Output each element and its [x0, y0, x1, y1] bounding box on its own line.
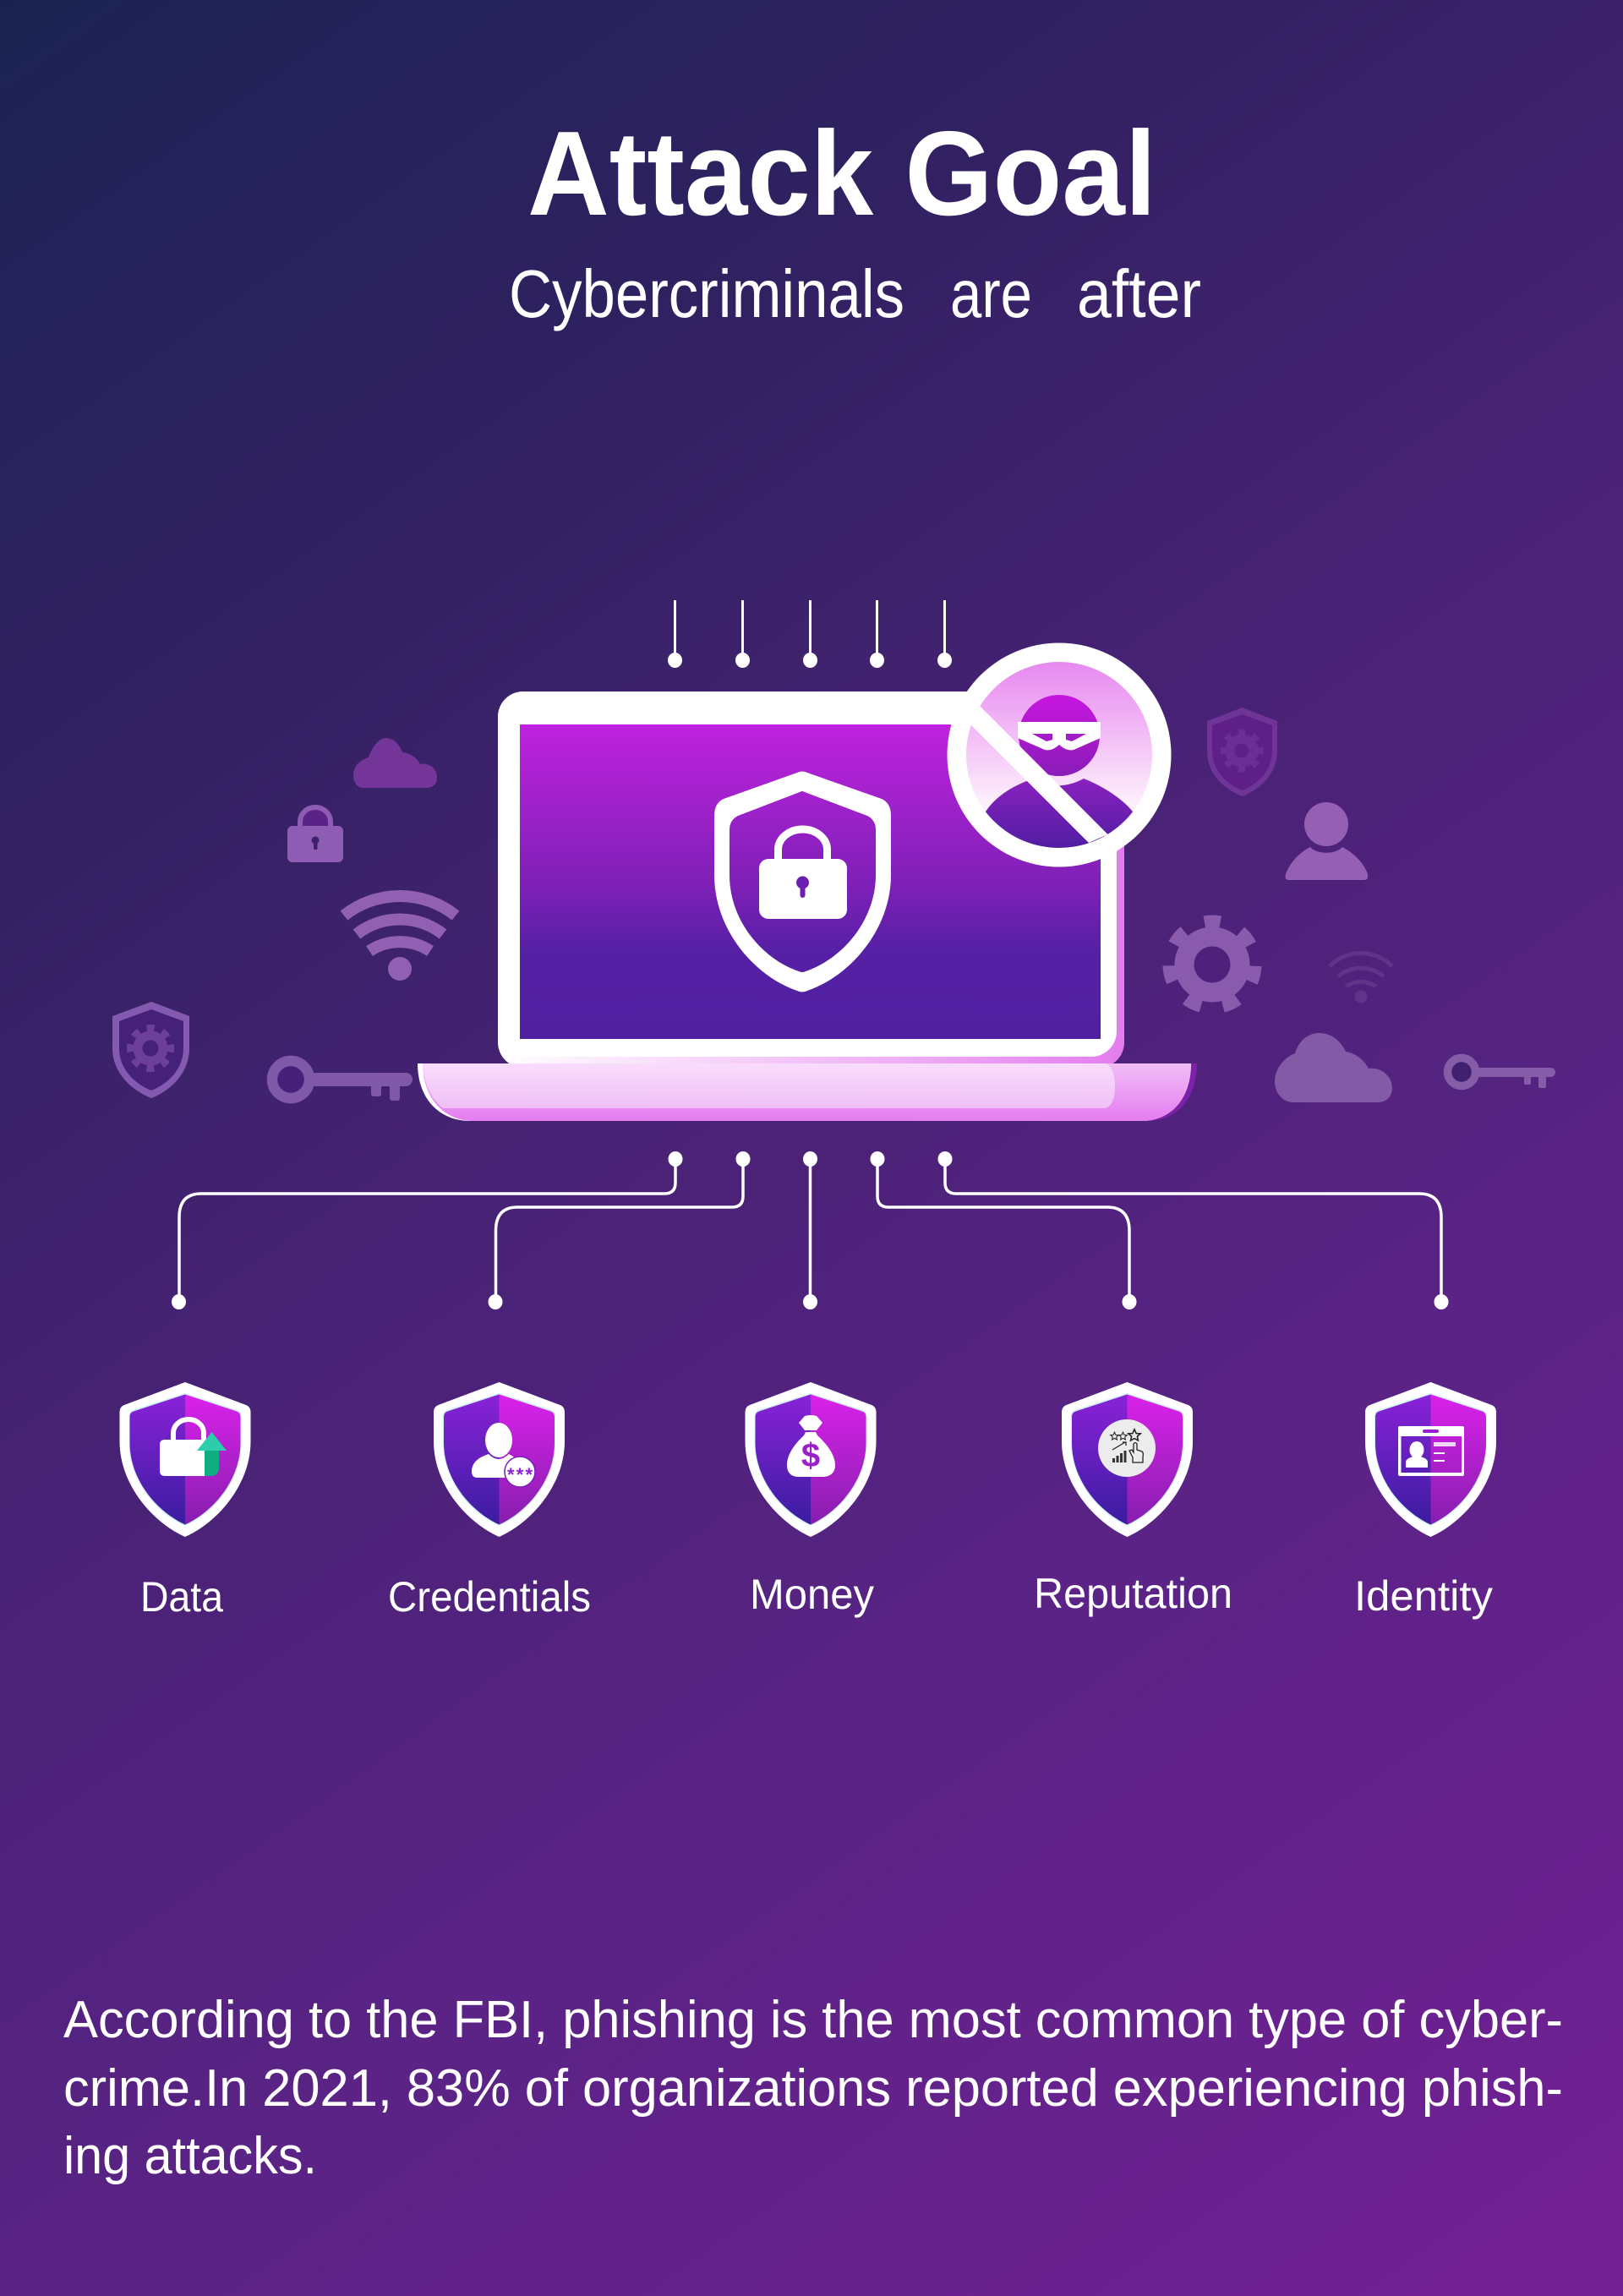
label: Identity: Identity	[1354, 1572, 1493, 1620]
laptop lid rim	[498, 692, 1124, 1068]
no-hacker badge	[947, 642, 1172, 867]
item: Reputation	[1034, 1382, 1232, 1617]
laptop screen	[520, 724, 1101, 1039]
item: Identity	[1354, 1382, 1496, 1620]
connector lines	[172, 1151, 1449, 1309]
icon: wifi left	[344, 896, 456, 981]
icon: money bag: $	[801, 1437, 820, 1474]
icon: user with password: ***	[507, 1464, 533, 1485]
label: Data: Data	[140, 1573, 223, 1621]
hacker figure	[986, 695, 1133, 854]
subtitle: are	[950, 256, 1032, 331]
icon: padlock left	[287, 807, 343, 862]
badge white ring	[947, 642, 1172, 867]
icon: user with password	[472, 1423, 535, 1487]
paragraph: ing attacks.	[63, 2127, 317, 2185]
subtitle	[509, 256, 1201, 331]
icon: large gear right	[1170, 922, 1254, 1007]
subtitle: after	[1077, 256, 1201, 331]
top connector pins	[668, 600, 952, 668]
item: Data	[120, 1382, 250, 1621]
icon: gear shield right	[1207, 708, 1277, 796]
item: Money	[746, 1382, 876, 1618]
prohibition slash	[970, 706, 1107, 843]
title: Attack Goal	[527, 107, 1156, 241]
paragraph	[63, 1991, 1563, 2185]
shield: Reputation	[1062, 1382, 1193, 1537]
icon: cloud upper left	[353, 738, 437, 788]
paragraph: According to the FBI, phishing is the most common type of cyber-	[63, 1991, 1563, 2049]
icon: id card	[1398, 1426, 1464, 1476]
icon: large cloud right	[1275, 1033, 1392, 1102]
icon: rating badge	[1098, 1419, 1156, 1477]
icon: key left	[272, 1061, 413, 1101]
icon: gear shield left	[112, 1002, 189, 1098]
icon: key right	[1447, 1058, 1555, 1088]
laptop	[418, 692, 1197, 1121]
icon: small wifi right	[1330, 954, 1392, 1003]
label: Reputation: Reputation	[1034, 1570, 1232, 1617]
shield: Money	[746, 1382, 876, 1537]
icon: person right	[1285, 802, 1368, 880]
subtitle: Cybercriminals	[509, 256, 904, 331]
shield: Data	[120, 1382, 250, 1537]
laptop lid front	[498, 692, 1117, 1057]
shield: Identity	[1365, 1382, 1496, 1537]
laptop base	[418, 1063, 1197, 1121]
badge inner disc	[966, 662, 1152, 848]
paragraph: crime.In 2021, 83% of organizations reported experiencing phish-	[63, 2059, 1563, 2118]
shield: Credentials	[434, 1382, 565, 1537]
icon: lock with upload arrow	[160, 1419, 227, 1476]
label: Credentials: Credentials	[388, 1573, 591, 1621]
shield on screen	[714, 771, 891, 992]
label: Money: Money	[750, 1571, 874, 1618]
padlock on screen	[759, 829, 847, 919]
item: Credentials	[388, 1382, 591, 1621]
icon: money bag	[787, 1415, 835, 1477]
